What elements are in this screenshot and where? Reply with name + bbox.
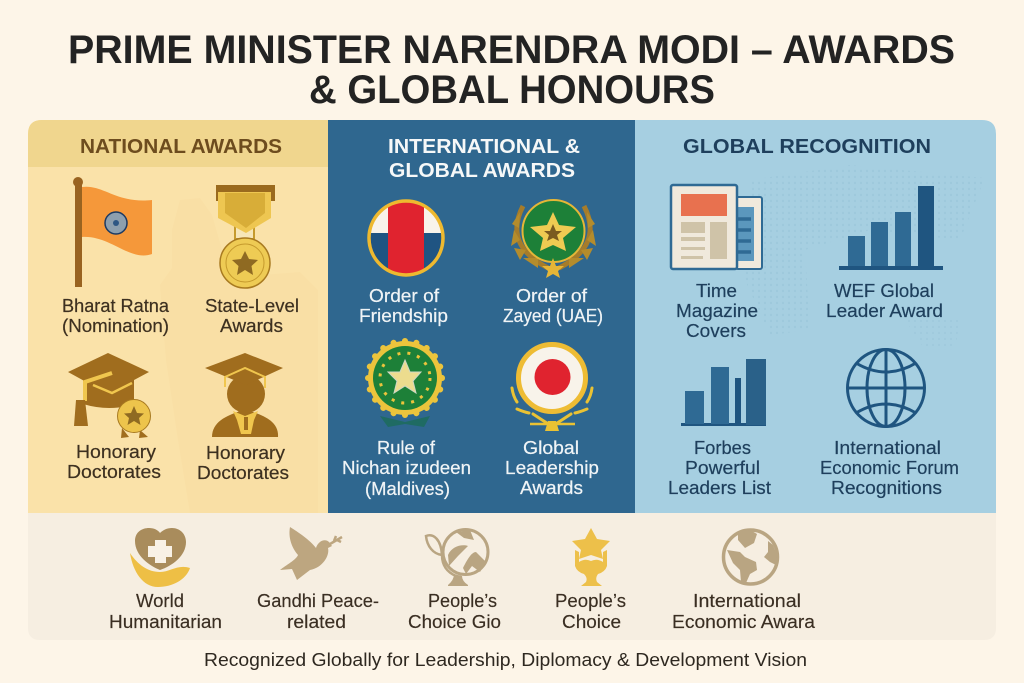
label: Order of Zayed: Order of bbox=[516, 286, 588, 306]
label: WEF Global Leader Award: WEF Global bbox=[834, 281, 934, 301]
label: World Humanitarian bbox=[109, 591, 222, 632]
label: Order of Friendship bbox=[359, 286, 448, 326]
title bbox=[68, 28, 955, 112]
panel: international and global awards bbox=[328, 120, 635, 513]
heading bbox=[388, 135, 580, 182]
label: International Economic Forum Recognitions: International bbox=[834, 438, 941, 458]
footer tagline: Recognized Globally for Leadership, Diplomacy & Development Vision bbox=[204, 650, 807, 670]
label: Forbes Powerful Leaders List: Forbes bbox=[694, 438, 751, 458]
label: Gandhi Peace-related bbox=[257, 591, 379, 632]
heading band: NATIONAL AWARDS bbox=[80, 135, 282, 158]
label: WEF Global Leader Award bbox=[826, 281, 943, 321]
label: World Humanitarian: Humanitarian bbox=[109, 612, 222, 632]
icon: globe with leaf bbox=[426, 530, 488, 586]
panel: global recognition bbox=[635, 120, 996, 513]
icon: magazine bbox=[671, 185, 762, 269]
label: International Economic Forum Recognitions bbox=[820, 438, 959, 498]
label: Rule of Nichan izudeen bbox=[342, 438, 471, 499]
label: Time Magazine Covers: Magazine bbox=[676, 301, 758, 321]
label: Order of Zayed bbox=[503, 286, 603, 326]
icon: order of zayed bbox=[511, 200, 596, 278]
label: Time Magazine Covers: Covers bbox=[686, 321, 746, 341]
label: Rule of Nichan izudeen: Nichan izudeen bbox=[342, 458, 471, 478]
label: Honorary Doctorates right: Honorary bbox=[206, 443, 285, 463]
label: Rule of Nichan izudeen: Rule of bbox=[377, 438, 436, 458]
label: Bharat Ratna: (Nomination) bbox=[62, 316, 169, 336]
label: Time Magazine Covers: Time bbox=[696, 281, 737, 301]
label: Order of Friendship: Friendship bbox=[359, 306, 448, 326]
icon: medal bbox=[216, 185, 275, 288]
label: Bharat Ratna bbox=[62, 296, 170, 336]
label: International Economic Award bbox=[672, 591, 816, 632]
heading: GLOBAL AWARDS bbox=[389, 159, 575, 182]
label: International Economic Award: International bbox=[693, 591, 801, 611]
icon: nichan izudeen seal bbox=[368, 341, 442, 427]
label: Time Magazine Covers bbox=[676, 281, 758, 341]
icon: wire globe bbox=[848, 350, 924, 426]
label: Bharat Ratna: Bharat Ratna bbox=[62, 296, 170, 316]
label: Global Leadership Awards: Global bbox=[523, 438, 579, 458]
heading band bbox=[28, 120, 328, 167]
label: Forbes Powerful Leaders List: Powerful bbox=[685, 458, 760, 478]
label: Order of Zayed: Zayed (UAE) bbox=[503, 306, 603, 326]
icon: graduate figure bbox=[205, 353, 283, 437]
label: Global Leadership Awards: Awards bbox=[520, 478, 583, 498]
panel: bottom honours strip bbox=[28, 513, 996, 640]
heading: GLOBAL RECOGNITION bbox=[683, 135, 931, 158]
label: WEF Global Leader Award: Leader Award bbox=[826, 301, 943, 321]
label: Honorary Doctorates left bbox=[67, 442, 161, 482]
label: State-Level Awards: Awards bbox=[220, 316, 283, 336]
icon: star trophy bbox=[572, 528, 610, 586]
label: Honorary Doctorates left: Doctorates bbox=[67, 462, 161, 482]
label: Gandhi Peace-related: Gandhi Peace- bbox=[257, 591, 379, 611]
label: People's Choice bbox=[555, 591, 626, 632]
title: PRIME MINISTER NARENDRA MODI – AWARDS bbox=[68, 28, 955, 72]
label: Forbes Powerful Leaders List bbox=[668, 438, 771, 498]
heading: INTERNATIONAL & bbox=[388, 135, 580, 158]
label: Honorary Doctorates right: Doctorates bbox=[197, 463, 289, 483]
icon: heart and hand bbox=[130, 528, 190, 587]
label: People's Choice: Choice bbox=[562, 612, 621, 632]
icon: order of friendship bbox=[368, 200, 444, 276]
label: International Economic Forum Recognitions: Economic Forum bbox=[820, 458, 959, 478]
icon: earth bbox=[724, 530, 778, 584]
label: People's Choice Gio: Choice Gio bbox=[408, 612, 501, 632]
panel: national awards bbox=[28, 120, 328, 513]
icon: global leadership roundel bbox=[512, 344, 592, 431]
label: State-Level Awards bbox=[205, 296, 299, 336]
label: Order of Friendship: Order of bbox=[369, 286, 440, 306]
label: International Economic Award: Economic Awara bbox=[672, 612, 816, 632]
label: Honorary Doctorates left: Honorary bbox=[76, 442, 156, 462]
label: International Economic Forum Recognitions: Recognitions bbox=[831, 478, 942, 498]
label: World Humanitarian: World bbox=[136, 591, 184, 611]
title: & GLOBAL HONOURS bbox=[309, 68, 715, 112]
icon: graduation cap with badge bbox=[68, 353, 150, 438]
label: State-Level Awards: State-Level bbox=[205, 296, 299, 316]
chart: Forbes bars bbox=[681, 359, 766, 426]
label: Honorary Doctorates right bbox=[197, 443, 289, 483]
label: People's Choice Gio bbox=[408, 591, 501, 632]
icon: dove bbox=[280, 527, 342, 580]
label: Global Leadership Awards: Leadership bbox=[505, 458, 599, 478]
label: Gandhi Peace-related: related bbox=[287, 612, 346, 632]
label: Global Leadership Awards bbox=[505, 438, 599, 498]
icon: flag bbox=[73, 177, 152, 287]
label: People's Choice Gio: People’s bbox=[428, 591, 497, 611]
chart: WEF bars bbox=[839, 186, 943, 270]
label: Rule of Nichan izudeen: (Maldives) bbox=[365, 479, 450, 499]
label: Forbes Powerful Leaders List: Leaders List bbox=[668, 478, 771, 498]
label: People's Choice: People’s bbox=[555, 591, 626, 611]
